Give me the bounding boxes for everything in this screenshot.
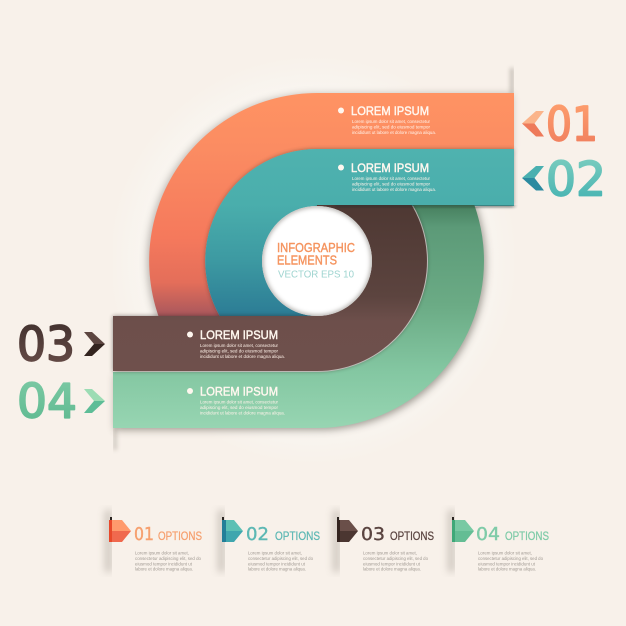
number 04: 04 bbox=[17, 374, 77, 430]
center subtitle: VECTOR EPS 10 bbox=[278, 268, 354, 280]
green ribbon shadow bbox=[110, 207, 491, 436]
body text: adipiscing elit, sed do eiusmod tempor bbox=[200, 405, 278, 410]
band 4 text bbox=[187, 384, 285, 416]
number: 01 bbox=[134, 524, 154, 545]
label 04 bbox=[17, 374, 105, 430]
teal ribbon arc bbox=[205, 149, 514, 330]
band 3 text bbox=[187, 328, 285, 359]
description: consectetur adipiscing elit, sed do bbox=[363, 556, 428, 561]
heading: LOREM IPSUM bbox=[200, 384, 278, 398]
band 1 text bbox=[338, 104, 436, 135]
description: eiusmod tempor incididunt ut bbox=[248, 562, 306, 566]
orange ribbon shadow bbox=[147, 94, 512, 331]
body text bbox=[200, 343, 285, 359]
teal band cover bbox=[330, 149, 514, 205]
description: eiusmod tempor incididunt ut bbox=[135, 562, 193, 566]
heading: LOREM IPSUM bbox=[351, 104, 429, 118]
number: 04 bbox=[476, 524, 500, 545]
card fold shadow bbox=[218, 510, 225, 572]
heading: LOREM IPSUM bbox=[200, 328, 278, 342]
green ribbon arc bbox=[113, 205, 484, 428]
ribbon arrow bbox=[109, 517, 131, 542]
ribbon arrow bbox=[337, 517, 358, 542]
heading: LOREM IPSUM bbox=[351, 161, 429, 175]
ribbon arrow bbox=[222, 517, 243, 542]
option 02 bbox=[218, 510, 320, 572]
brown ribbon shadow bbox=[110, 205, 430, 374]
white disc bbox=[262, 206, 372, 316]
central light panel bbox=[113, 55, 514, 465]
label 03 bbox=[17, 318, 105, 372]
bullet bbox=[187, 388, 193, 394]
body text: Lorem ipsum dolor sit amet, consectetur bbox=[352, 176, 430, 181]
arrow 03 bbox=[84, 332, 105, 356]
label: OPTIONS bbox=[390, 531, 434, 543]
label: OPTIONS bbox=[275, 531, 320, 543]
card fold shadow bbox=[105, 510, 112, 572]
fold shadow at left edge bbox=[113, 425, 117, 450]
body text: Lorem ipsum dolor sit amet, consectetur bbox=[352, 119, 430, 124]
bullet bbox=[338, 108, 344, 114]
description bbox=[248, 550, 313, 572]
number 03: 03 bbox=[17, 318, 75, 372]
card fold shadow bbox=[448, 510, 455, 572]
ribbon arrow bbox=[452, 517, 474, 542]
description: Lorem ipsum dolor sit amet, bbox=[248, 550, 302, 556]
description: Lorem ipsum dolor sit amet, bbox=[478, 550, 532, 556]
main circular diagram bbox=[113, 93, 514, 430]
body text: adipiscing elit, sed do eiusmod tempor bbox=[352, 124, 430, 130]
body text: adipiscing elit, sed do eiusmod tempor bbox=[200, 348, 278, 354]
fold shadow at right edge bbox=[510, 68, 514, 98]
number 02: 02 bbox=[546, 152, 606, 208]
teal ribbon shadow bbox=[205, 149, 514, 330]
body text bbox=[352, 119, 436, 135]
description bbox=[478, 550, 543, 572]
center title: INFOGRAPHIC bbox=[277, 241, 355, 255]
body text: incididunt ut labore et dolore magna aliqua. bbox=[200, 354, 285, 359]
arrow 04 bbox=[84, 389, 105, 413]
option 01 bbox=[105, 510, 202, 572]
description bbox=[135, 550, 201, 572]
bullet bbox=[187, 332, 193, 338]
body text bbox=[200, 400, 285, 416]
description: eiusmod tempor incididunt ut bbox=[478, 562, 536, 566]
body text bbox=[352, 176, 436, 192]
center circle bbox=[261, 205, 373, 317]
description: labore et dolore magna aliqua. bbox=[363, 566, 421, 572]
card fold shadow bbox=[333, 510, 340, 572]
description: consectetur adipiscing elit, sed do bbox=[248, 556, 313, 561]
body text: incididunt ut labore et dolore magna aliqua. bbox=[200, 410, 285, 416]
center title second line: ELEMENTS bbox=[277, 254, 337, 268]
body text: Lorem ipsum dolor sit amet, consectetur bbox=[200, 400, 278, 404]
body text: Lorem ipsum dolor sit amet, consectetur bbox=[200, 343, 278, 348]
body text: adipiscing elit, sed do eiusmod tempor bbox=[352, 182, 430, 186]
label: OPTIONS bbox=[505, 531, 549, 543]
description: Lorem ipsum dolor sit amet, bbox=[363, 550, 417, 556]
label 02 bbox=[522, 152, 606, 208]
band 2 text bbox=[338, 161, 436, 192]
description: labore et dolore magna aliqua. bbox=[135, 566, 193, 572]
bullet bbox=[338, 164, 344, 170]
label: OPTIONS bbox=[158, 531, 202, 543]
description bbox=[363, 550, 428, 572]
arrow 02 bbox=[522, 166, 544, 190]
option 04 bbox=[448, 510, 549, 572]
description: eiusmod tempor incididunt ut bbox=[363, 562, 421, 566]
brown ribbon arc bbox=[113, 205, 427, 371]
arrow 01 bbox=[522, 111, 544, 136]
orange ribbon arc bbox=[149, 93, 514, 330]
description: consectetur adipiscing elit, sed do bbox=[478, 556, 543, 561]
number 01: 01 bbox=[546, 98, 598, 152]
label 01 bbox=[522, 98, 598, 152]
number: 03 bbox=[361, 524, 385, 545]
description: labore et dolore magna aliqua. bbox=[478, 566, 536, 572]
disc inner shadow bbox=[261, 205, 373, 317]
description: consectetur adipiscing elit, sed do bbox=[135, 556, 201, 561]
description: labore et dolore magna aliqua. bbox=[248, 566, 306, 572]
body text: incididunt ut labore et dolore magna aliqua. bbox=[352, 130, 436, 135]
body text: incididunt ut labore et dolore magna aliqua. bbox=[352, 187, 436, 192]
description: Lorem ipsum dolor sit amet, bbox=[135, 550, 189, 556]
number: 02 bbox=[246, 524, 269, 545]
option 03 bbox=[333, 510, 434, 572]
teal top shadow bbox=[335, 205, 516, 208]
